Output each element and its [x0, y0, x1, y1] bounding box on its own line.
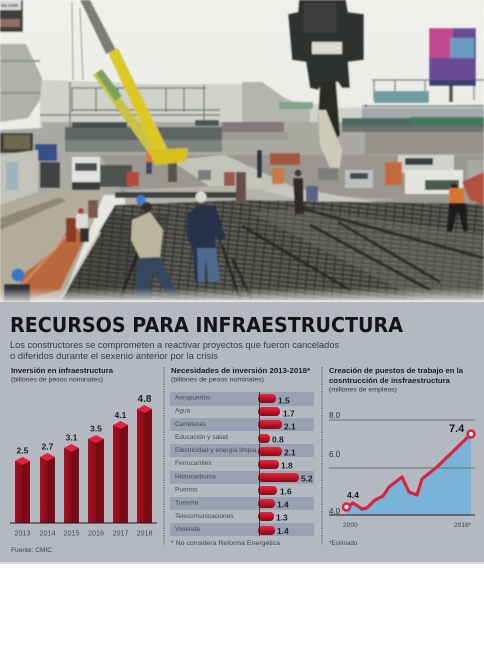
main crane arm: [80, 0, 116, 54]
area under line: [347, 434, 471, 515]
source: Fuente: CMIC: [11, 547, 52, 554]
horizontal bars: [258, 394, 299, 535]
year labels: 2015: [64, 528, 80, 538]
crane hook block: [288, 0, 364, 168]
title: RECURSOS PARA INFRAESTRUCTURA: [10, 313, 403, 337]
bar values: [272, 396, 313, 536]
year labels: 2000: [343, 522, 358, 529]
line end markers: [343, 431, 474, 510]
chart heading: Inversión en infraestructura: [11, 366, 114, 375]
worker: far left group: [76, 200, 98, 242]
year labels: 2018*: [454, 522, 472, 529]
bar values: 1.6: [280, 486, 292, 496]
chart heading: Necesidades de inversión 2013-2018*: [171, 366, 310, 375]
top-left billboard: [0, 0, 23, 32]
bar values: 0.8: [272, 434, 284, 444]
pedestrian bridge: [65, 127, 222, 140]
row labels: Turismo: [175, 500, 199, 507]
year labels: 2013: [14, 528, 30, 538]
raised slab: [125, 186, 400, 205]
year labels: 2017: [112, 528, 128, 538]
white truck: [72, 157, 100, 189]
footnote: *Estimado: [329, 540, 358, 547]
axis labels: [329, 411, 341, 516]
small background workers: [127, 150, 284, 202]
bar values: 1.8: [281, 460, 293, 470]
gray information panel: [0, 302, 484, 562]
row labels: Vivienda: [175, 526, 200, 533]
axis labels: 6.0: [329, 450, 341, 459]
year labels: 2018: [136, 528, 152, 538]
photo: road construction site: es.com: [1, 3, 19, 9]
right gantries: [362, 80, 484, 155]
footnote: * No considera Reforma Energética: [171, 540, 281, 547]
photo: road construction site: [0, 0, 484, 302]
gridlines: [329, 420, 475, 468]
row labels: Puertos: [175, 486, 198, 494]
bar values: 2.1: [284, 422, 296, 432]
worker: orange vest right: [447, 184, 468, 232]
bar values: 5.2: [301, 474, 313, 484]
bars: [10, 405, 157, 523]
bar values: 1.4: [277, 526, 289, 536]
second crane arm: [93, 70, 158, 155]
line values: 4.4: [347, 490, 359, 500]
bar values: 1.3: [276, 512, 288, 522]
street: [0, 190, 105, 300]
concrete mesh deck: [62, 200, 484, 300]
chart heading: [171, 366, 310, 384]
left buildings: [0, 128, 43, 208]
panel: investment in infrastructure bar chart: [10, 366, 157, 554]
row labels: Aeropuertos: [175, 394, 211, 402]
chart heading: (billones de pesos nominales): [11, 378, 103, 384]
chart heading: Creación de puestos de trabajo en la: [329, 366, 464, 375]
chart heading: (millones de empleos): [329, 388, 397, 394]
chart heading: (billones de pesos nominales): [171, 378, 264, 384]
line values: 7.4: [449, 423, 465, 435]
year labels: [343, 522, 472, 529]
bar values: 1.4: [277, 500, 289, 510]
bar values: 1.7: [283, 408, 295, 418]
left tank: [0, 44, 42, 122]
worker: middle dark: [293, 170, 318, 214]
subtitle: [10, 340, 339, 362]
background road with traffic: [100, 155, 484, 205]
bar values: 4.1: [115, 410, 127, 420]
row labels: Educación y salud: [175, 434, 228, 441]
worker: blue overalls: [186, 192, 226, 283]
bar values: 2.7: [42, 442, 54, 452]
chart heading: cosntrucción de insfraestructura: [329, 376, 451, 385]
panel: investment needs horizontal bars: [170, 366, 314, 547]
axis labels: 4.0: [329, 507, 341, 516]
subtitle: o diferidos durante el sexenio anterior por la crisis: [10, 351, 218, 362]
row labels: Hidrocarburos: [175, 473, 217, 480]
bar values: 3.5: [90, 424, 102, 434]
row labels: [175, 394, 257, 533]
axis labels: 8.0: [329, 411, 341, 420]
jobs line: [347, 434, 471, 509]
year labels: 2016: [88, 528, 104, 538]
chart heading: [11, 366, 114, 384]
year labels: 2014: [40, 528, 56, 538]
workers: seated foreground: [4, 268, 30, 302]
row labels: Carreteras: [175, 421, 206, 428]
row labels: Agua: [175, 408, 191, 415]
bar values: 4.8: [138, 394, 152, 405]
worker: beige shirt: [131, 195, 178, 298]
bar values: 2.5: [17, 446, 29, 456]
purple billboard: [429, 28, 476, 102]
year labels: [14, 528, 152, 538]
bar values: 1.5: [278, 396, 290, 406]
chart heading: [329, 366, 464, 394]
row labels: Ferrocarriles: [175, 460, 212, 467]
orange safety fence: [20, 228, 84, 298]
bar values: [17, 394, 152, 456]
panel: construction jobs line chart: [329, 366, 475, 547]
bar values: 3.1: [66, 432, 78, 442]
row labels: Electricidad y energía limpia: [175, 447, 257, 454]
row labels: Telecomunicaciones: [175, 513, 234, 520]
truss structure: [40, 82, 220, 128]
row bands: [170, 392, 314, 536]
subtitle: Los constructores se comprometen a reactivar proyectos que fueron cancelados: [10, 340, 339, 351]
line values: [347, 423, 465, 500]
bar values: 2.1: [284, 448, 296, 458]
